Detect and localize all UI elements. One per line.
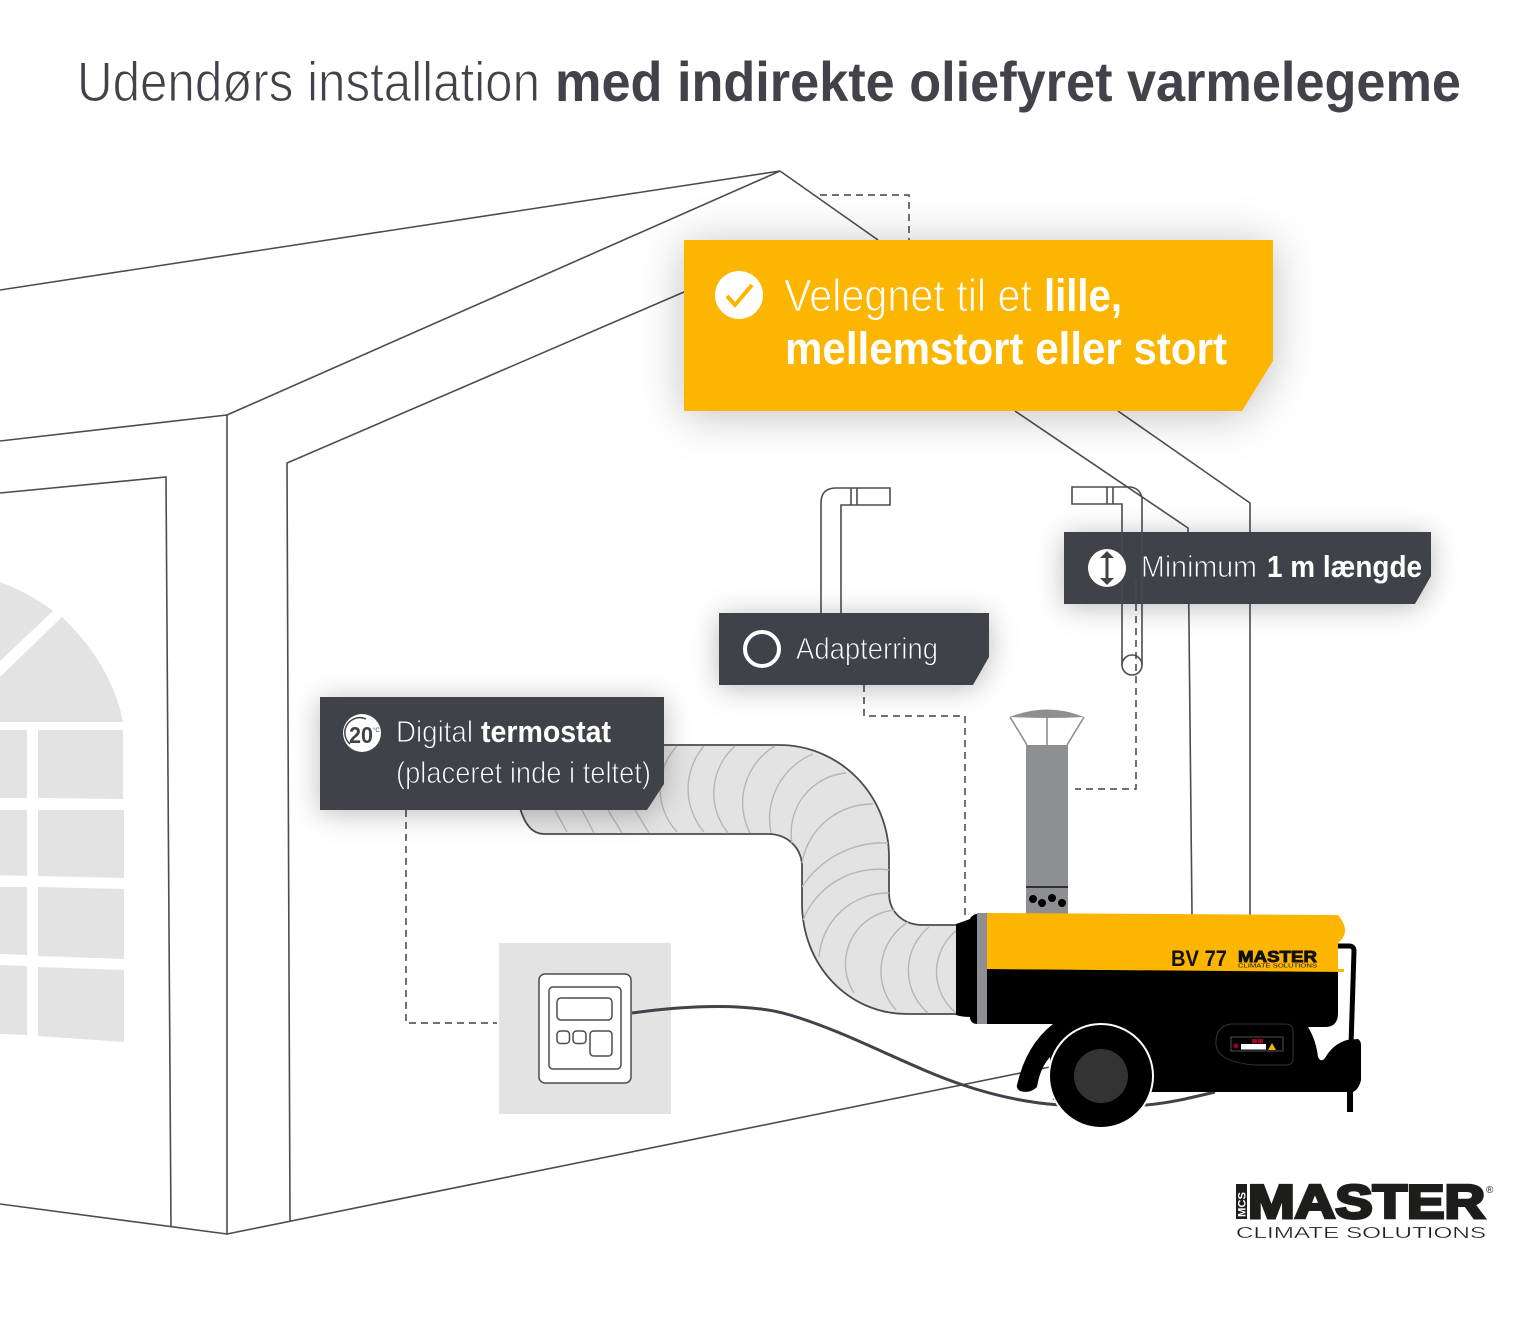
heater brand logo: CLIMATE SOLUTIONS [1238,964,1317,970]
callout text: Digital [396,714,473,749]
heater control panel [1216,1024,1293,1065]
flue pipe right [1072,487,1142,675]
dashed leader lines [406,195,1136,1023]
tent window [0,582,124,1042]
callout text: termostat [481,714,611,749]
icon: vertical arrow [1088,549,1126,587]
title: med indirekte oliefyret varmelegeme [555,50,1461,113]
heater handle [1336,946,1354,1045]
heater chimney [1010,710,1084,915]
callout text [1141,549,1422,584]
callout text: Minimum [1141,549,1257,584]
heater body [956,913,1361,1112]
icon: thermostat display [343,714,381,752]
heater model label: BV 77 [1171,946,1227,971]
tent outline [0,171,1250,1234]
title: Udendørs installation [77,50,540,113]
callout: digital thermostat [320,697,664,810]
logo: tagline: CLIMATE SOLUTIONS [1236,1225,1486,1242]
callout text: 1 m længde [1267,549,1422,584]
callout: adapter ring [719,613,989,685]
callout text: Adapterring [796,631,938,666]
callout text: mellemstort eller stort [785,323,1227,374]
callout: tent size [684,240,1273,411]
callout text [784,270,1227,374]
callout text: Velegnet til et [784,270,1032,321]
logo: MCS badge: MCS [1236,1192,1248,1217]
icon: thermostat display: °C [373,728,380,734]
thermostat panel [499,943,671,1114]
callout text: (placeret inde i teltet) [396,755,651,790]
heater wheel [1049,1024,1153,1128]
brand logo [1236,1175,1494,1242]
icon: ring [745,632,779,666]
thermostat device [539,974,631,1083]
logo: registered mark: ® [1486,1185,1494,1196]
flexible air duct [510,745,960,1014]
callout text: lille, [1044,270,1122,321]
icon: thermostat display: 20 [349,722,373,748]
callout text [396,714,651,790]
flue pipe left [821,488,890,614]
logo: MCS badge [1236,1184,1248,1219]
icon: check mark [715,271,763,319]
power cable [632,1006,1215,1105]
heater brand logo: MASTER [1238,949,1318,966]
logo: wordmark: MASTER [1248,1175,1485,1228]
title [77,50,1461,113]
callout: minimum length [1064,532,1431,604]
